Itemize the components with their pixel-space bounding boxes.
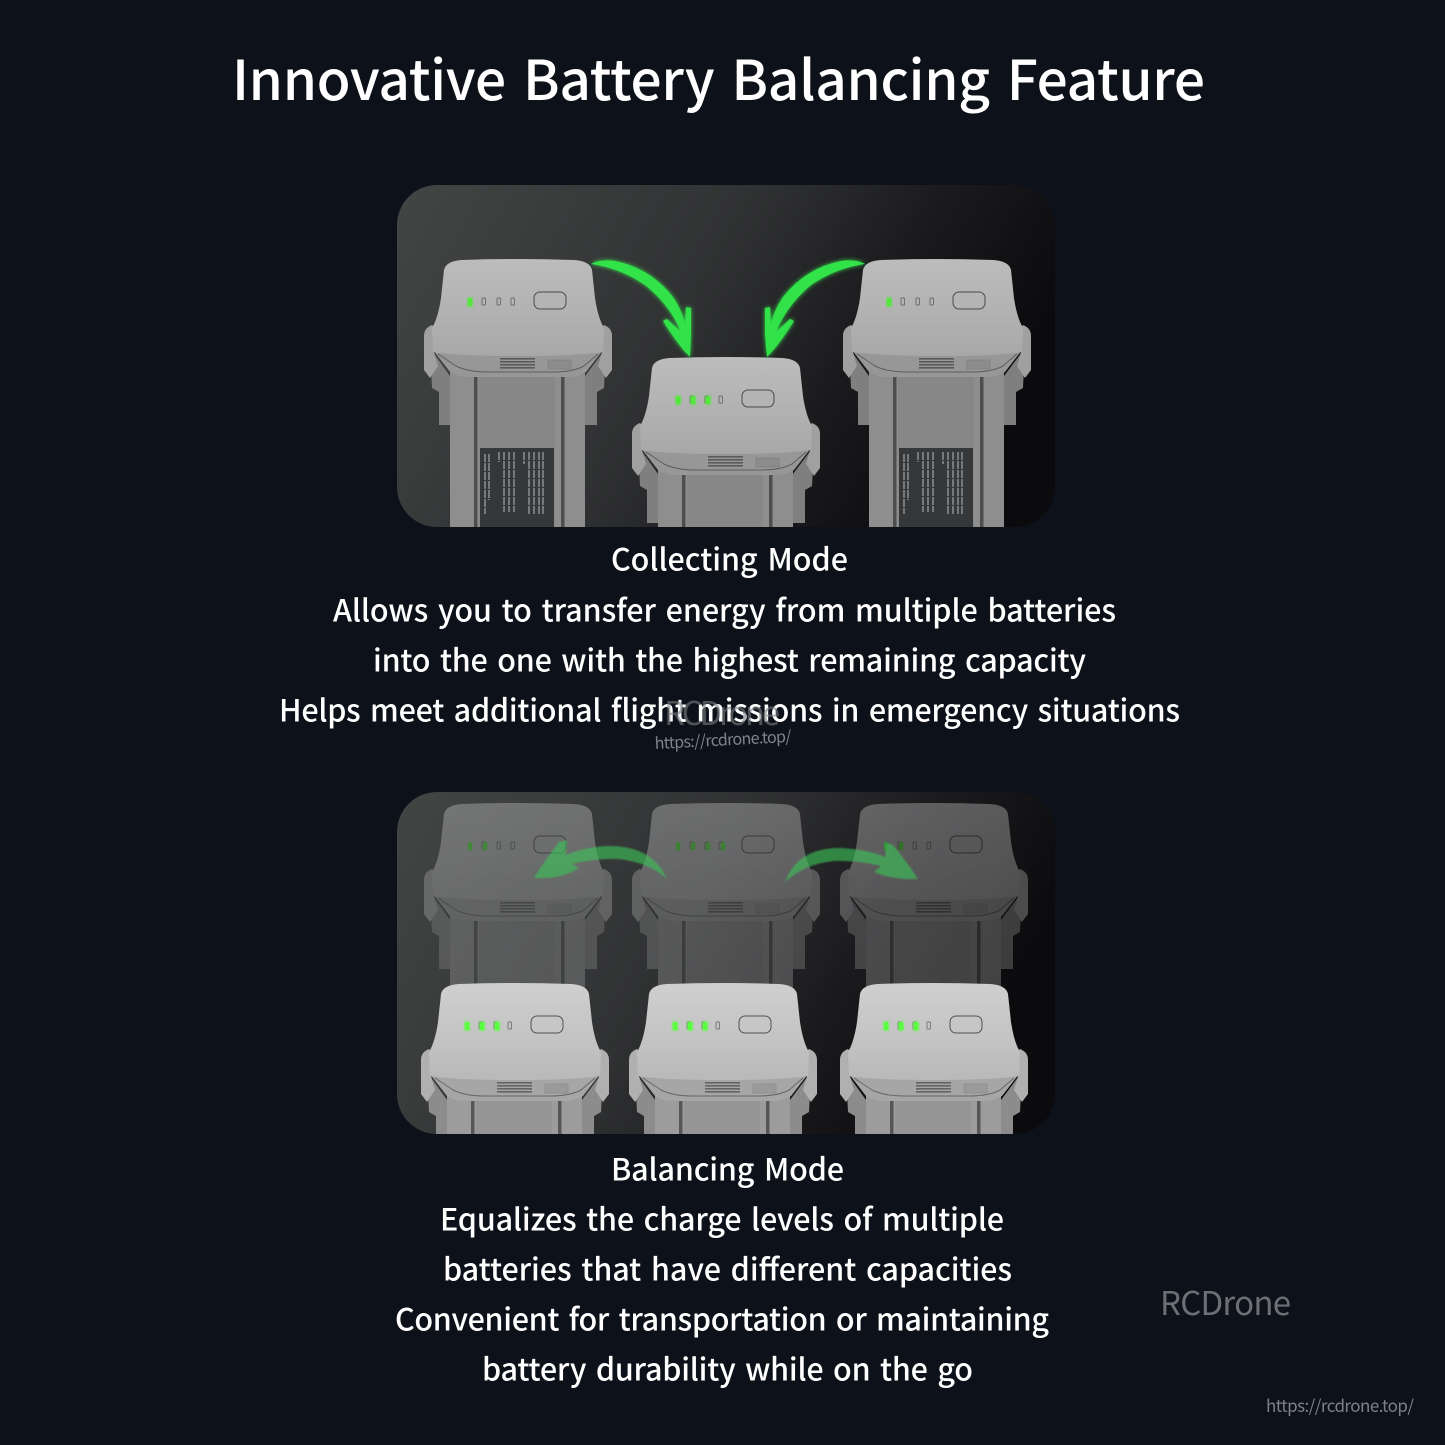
text block: balancing mode bbox=[395, 1146, 1049, 1390]
back row batteries, dimmed bbox=[424, 803, 1028, 988]
line 1: Allows you to transfer energy from multiple batteries bbox=[333, 586, 1116, 630]
watermark: centre: RCDrone bbox=[664, 687, 780, 735]
heading: balancing mode: Balancing Mode bbox=[611, 1146, 844, 1190]
watermark: bottom right: RCDrone bbox=[1160, 1277, 1291, 1325]
watermark: bottom right bbox=[1160, 1277, 1414, 1417]
watermark: centre bbox=[654, 687, 793, 754]
panel: collecting mode image bbox=[397, 185, 1055, 527]
watermark: centre: https://rcdrone.top/ bbox=[654, 723, 793, 754]
arrow: left battery to centre bbox=[591, 260, 691, 357]
battery: left, one LED lit bbox=[424, 259, 612, 550]
text block: collecting mode bbox=[279, 536, 1180, 730]
line 1: Equalizes the charge levels of multiple bbox=[440, 1196, 1004, 1240]
line 2: batteries that have different capacities bbox=[443, 1246, 1012, 1290]
line 2: into the one with the highest remaining capacity bbox=[373, 636, 1086, 680]
panel: balancing mode image bbox=[397, 792, 1055, 1134]
battery: centre, three LEDs lit bbox=[632, 357, 820, 527]
battery: right, one LED lit bbox=[843, 259, 1031, 550]
watermark: bottom right: https://rcdrone.top/ bbox=[1266, 1392, 1414, 1417]
arrow: centre to right bbox=[785, 842, 918, 882]
front row battery: centre bbox=[629, 983, 817, 1134]
line 3: Convenient for transportation or maintaining bbox=[395, 1296, 1049, 1340]
line 4: battery durability while on the go bbox=[482, 1346, 973, 1390]
front row battery: left bbox=[421, 983, 609, 1134]
arrow: right battery to centre bbox=[765, 260, 865, 357]
arrow: centre to left bbox=[534, 840, 667, 879]
line 3: Helps meet additional flight missions in emergency situations bbox=[279, 686, 1180, 730]
heading: collecting mode: Collecting Mode bbox=[611, 536, 848, 580]
front row battery: right bbox=[840, 983, 1028, 1134]
title: Innovative Battery Balancing Feature bbox=[232, 36, 1205, 116]
